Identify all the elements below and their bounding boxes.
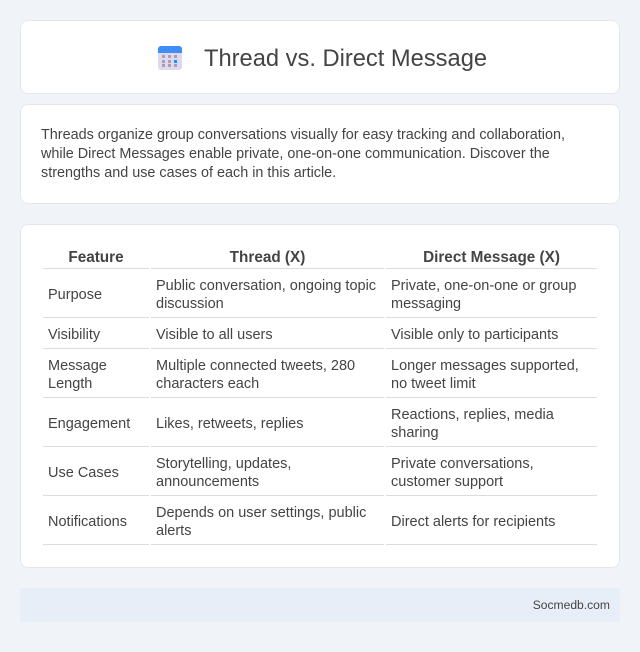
table card bbox=[20, 224, 620, 568]
comparison table: Storytelling, updates, bbox=[156, 456, 291, 472]
title card bbox=[20, 20, 620, 94]
row: Message Length bbox=[48, 358, 107, 392]
comparison table: Private conversations, bbox=[391, 456, 534, 472]
row: Engagement: Engagement bbox=[48, 416, 130, 432]
comparison table: sharing bbox=[391, 425, 439, 441]
header: Feature: Feature bbox=[68, 249, 124, 266]
comparison table: characters each bbox=[156, 376, 259, 392]
row: Purpose: Purpose bbox=[48, 287, 102, 303]
comparison table: customer support bbox=[391, 474, 503, 490]
comparison table: Longer messages supported, bbox=[391, 358, 579, 374]
intro text: while Direct Messages enable private, one-on-one communication. Discover the bbox=[41, 146, 550, 162]
intro card bbox=[20, 104, 620, 204]
row: Use Cases: Use Cases bbox=[48, 465, 119, 481]
row: Visibility: Visibility bbox=[48, 327, 100, 343]
comparison table: messaging bbox=[391, 296, 461, 312]
comparison table: Visible only to participants bbox=[391, 327, 558, 343]
comparison table: Multiple connected tweets, 280 bbox=[156, 358, 355, 374]
comparison table: Likes, retweets, replies bbox=[156, 416, 303, 432]
row: Message Length: Message bbox=[48, 358, 107, 374]
comparison table: no tweet limit bbox=[391, 376, 476, 392]
header: Thread: Thread (X) bbox=[230, 249, 305, 266]
intro text: strengths and use cases of each in this article. bbox=[41, 165, 336, 181]
row: Notifications: Notifications bbox=[48, 514, 127, 530]
comparison table: alerts bbox=[156, 523, 191, 539]
comparison table: discussion bbox=[156, 296, 224, 312]
comparison table: Private, one-on-one or group bbox=[391, 278, 576, 294]
intro text: Threads organize group conversations visually for easy tracking and collaboration, bbox=[41, 127, 565, 143]
header: Direct Message: Direct Message (X) bbox=[423, 249, 560, 266]
icon: calendar bbox=[158, 46, 182, 70]
comparison table: Reactions, replies, media bbox=[391, 407, 554, 423]
comparison table: Visible to all users bbox=[156, 327, 273, 343]
footer bar bbox=[20, 588, 620, 622]
comparison table: Public conversation, ongoing topic bbox=[156, 278, 376, 294]
title: Thread vs. Direct Message bbox=[204, 46, 487, 72]
footer text: Socmedb.com bbox=[533, 598, 610, 612]
comparison table: Depends on user settings, public bbox=[156, 505, 366, 521]
comparison table: Direct alerts for recipients bbox=[391, 514, 555, 530]
row: Message Length: Length bbox=[48, 376, 92, 392]
intro text bbox=[41, 127, 565, 181]
comparison table: announcements bbox=[156, 474, 259, 490]
